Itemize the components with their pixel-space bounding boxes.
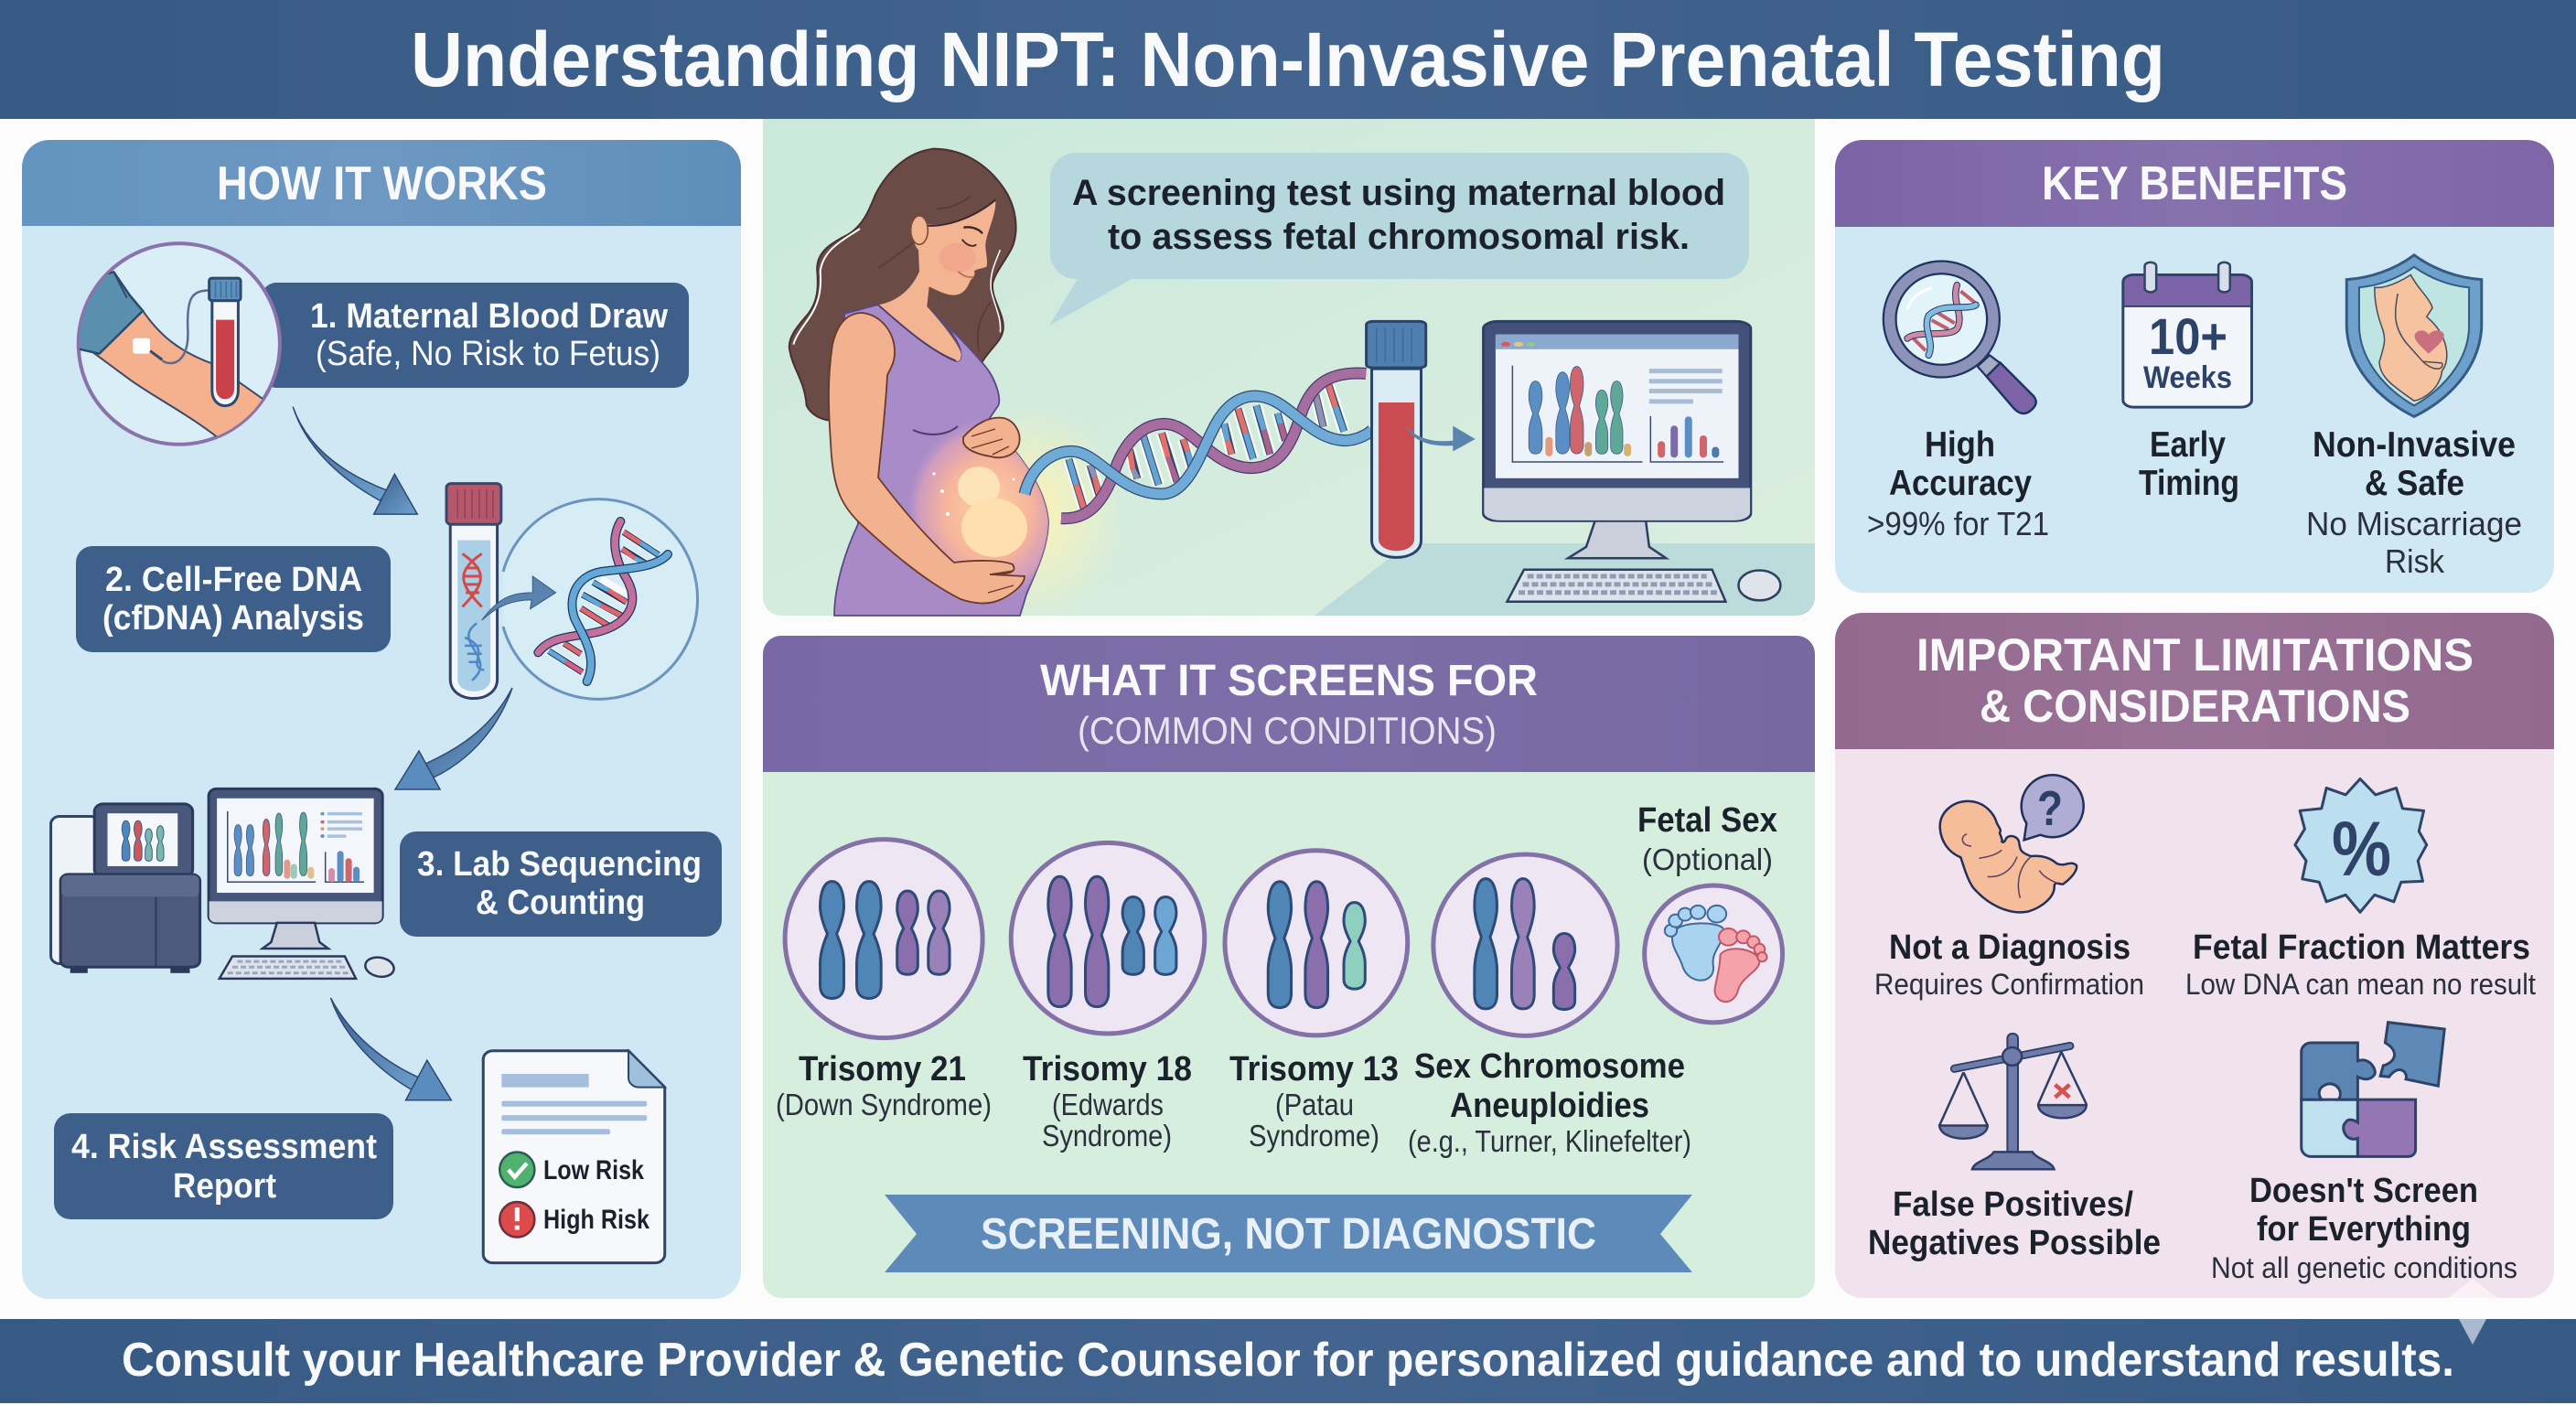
karyotype: trisomy 21 xyxy=(785,840,982,1038)
label: trisomy 18: Trisomy 18 xyxy=(1023,1050,1192,1089)
step 3 label: 3. Lab Sequencing xyxy=(417,845,702,884)
panel: key benefits xyxy=(1835,140,2554,593)
icon: puzzle pieces xyxy=(2302,1023,2444,1156)
limitation: not a diagnosis xyxy=(1874,928,2144,1001)
label: sex chromosome aneuploidies: (e.g., Turner, Klinefelter) xyxy=(1408,1124,1691,1158)
step 3 label: & Counting xyxy=(476,884,645,922)
label: trisomy 18 xyxy=(1023,1050,1192,1153)
heading: what it screens for: WHAT IT SCREENS FOR xyxy=(1040,657,1538,705)
label: sex chromosome aneuploidies: Aneuploidies xyxy=(1450,1087,1649,1125)
benefit: non-invasive and safe: & Safe xyxy=(2365,464,2464,503)
benefit: high accuracy: Accuracy xyxy=(1889,464,2032,503)
arm and lower hand xyxy=(829,313,1025,604)
benefit: non-invasive and safe: No Miscarriage xyxy=(2306,505,2522,542)
benefit: high accuracy: >99% for T21 xyxy=(1867,505,2049,542)
footer bar xyxy=(0,1319,2576,1403)
heading: important limitations xyxy=(1916,629,2474,732)
step 3 label xyxy=(400,831,722,937)
heading: how it works: HOW IT WORKS xyxy=(217,157,547,210)
benefit: early timing: Early xyxy=(2150,425,2226,465)
illustration: pregnant woman xyxy=(789,149,1125,622)
step 4 label xyxy=(54,1113,393,1219)
label: trisomy 13: Trisomy 13 xyxy=(1229,1050,1399,1089)
label: trisomy 21: (Down Syndrome) xyxy=(776,1088,992,1121)
page header bar xyxy=(0,0,2576,119)
label: trisomy 13 xyxy=(1229,1050,1399,1153)
label: fetal sex: Fetal Sex xyxy=(1637,801,1777,840)
ribbon: screening, not diagnostic xyxy=(885,1195,1692,1272)
belly halo xyxy=(942,402,1125,622)
label: sex chromosome aneuploidies: Sex Chromosome xyxy=(1414,1047,1685,1086)
karyotype: trisomy 13 xyxy=(1225,851,1408,1035)
speech bubble xyxy=(1049,153,1749,326)
dress xyxy=(834,305,1048,616)
icon: percent badge: % xyxy=(2332,806,2391,892)
label: sex chromosome aneuploidies xyxy=(1408,1047,1691,1158)
limitation: false positives and negatives: False Positives/ xyxy=(1893,1185,2133,1224)
step 1 label: (Safe, No Risk to Fetus) xyxy=(316,335,660,373)
icon: blood draw from arm xyxy=(68,243,280,445)
label: trisomy 13: Syndrome) xyxy=(1249,1119,1379,1153)
limitation: does not screen for everything xyxy=(2211,1172,2517,1284)
icon: risk report document: Low Risk xyxy=(543,1155,644,1185)
icon: risk report document: High Risk xyxy=(543,1205,649,1235)
heading: key benefits: KEY BENEFITS xyxy=(2042,157,2347,210)
limitation: not a diagnosis: Not a Diagnosis xyxy=(1889,928,2131,967)
title: Understanding NIPT: Non-Invasive Prenatal Testing xyxy=(411,16,2165,102)
icon: risk report document xyxy=(483,1051,665,1263)
speech bubble: A screening test using maternal blood xyxy=(1072,173,1725,213)
benefit: non-invasive and safe: Non-Invasive xyxy=(2313,425,2516,465)
step 1 label: 1. Maternal Blood Draw xyxy=(310,297,668,336)
illustration: DNA helix from fetus to tube xyxy=(1025,373,1372,519)
limitation: does not screen for everything: Not all genetic conditions xyxy=(2211,1251,2517,1284)
icon: calendar 10+ weeks: Weeks xyxy=(2143,360,2232,395)
benefit: non-invasive and safe: Risk xyxy=(2385,542,2445,580)
label: fetal sex: (Optional) xyxy=(1642,842,1773,876)
benefit: early timing xyxy=(2139,425,2239,503)
karyotype: sex chromosome aneuploidies xyxy=(1433,854,1617,1035)
arrow: step 3 to 4 xyxy=(331,998,451,1100)
step 2 label xyxy=(76,546,391,652)
heading: important limitations: IMPORTANT LIMITATIONS xyxy=(1916,629,2474,681)
icon: calendar 10+ weeks xyxy=(2123,263,2251,407)
limitation: fetal fraction matters xyxy=(2185,928,2536,1001)
limitation: false positives and negatives xyxy=(1868,1185,2161,1262)
benefit: high accuracy xyxy=(1867,425,2049,542)
icon: balance scale xyxy=(1939,1034,2087,1169)
label: fetal sex xyxy=(1637,801,1777,876)
label: trisomy 21: Trisomy 21 xyxy=(799,1050,966,1089)
icon: magnifier with DNA xyxy=(1890,267,2036,413)
ribbon: screening, not diagnostic: SCREENING, NOT DIAGNOSTIC xyxy=(981,1210,1596,1259)
label: trisomy 21 xyxy=(776,1050,992,1121)
benefit: early timing: Timing xyxy=(2139,464,2239,503)
label: trisomy 18: Syndrome) xyxy=(1042,1119,1172,1153)
icon: fetus with question mark xyxy=(1940,775,2084,912)
step 2 label: (cfDNA) Analysis xyxy=(102,599,364,638)
icon: cfDNA tube and helix xyxy=(446,484,698,699)
arrow: step 1 to 2 xyxy=(293,407,417,514)
limitation: does not screen for everything: for Everything xyxy=(2257,1210,2471,1249)
icon: fetus with question mark: ? xyxy=(2037,781,2063,836)
panel: how it works xyxy=(22,140,741,1299)
heading: important limitations: & CONSIDERATIONS xyxy=(1980,681,2410,732)
benefit: high accuracy: High xyxy=(1925,425,1995,465)
limitation: fetal fraction matters: Fetal Fraction Matters xyxy=(2193,928,2530,967)
desk surface xyxy=(1315,543,1815,616)
icon: calendar 10+ weeks: 10+ xyxy=(2149,307,2227,365)
icon: sequencer and computer xyxy=(51,788,396,980)
label: trisomy 18: (Edwards xyxy=(1052,1088,1164,1121)
icon: percent badge xyxy=(2295,778,2427,912)
footer message: Consult your Healthcare Provider & Genetic Counselor for personalized guidance and to understand results. xyxy=(122,1334,2454,1387)
limitation: fetal fraction matters: Low DNA can mean no result xyxy=(2185,968,2536,1001)
speech bubble: to assess fetal chromosomal risk. xyxy=(1108,217,1690,257)
limitation: does not screen for everything: Doesn't Screen xyxy=(2249,1172,2478,1210)
limitation: not a diagnosis: Requires Confirmation xyxy=(1874,968,2144,1001)
illustration: computer with chromosome chart xyxy=(1484,321,1780,602)
panel: what it screens for xyxy=(763,636,1815,1298)
step 2 label: 2. Cell-Free DNA xyxy=(105,561,362,599)
step 4 label: 4. Risk Assessment xyxy=(71,1128,377,1166)
illustration: blood tube xyxy=(1367,321,1476,557)
karyotype: trisomy 18 xyxy=(1011,842,1205,1034)
icon: baby feet xyxy=(1645,885,1783,1023)
icon: shield with pregnant torso xyxy=(2346,255,2482,416)
benefit: non-invasive and safe xyxy=(2306,425,2522,580)
limitation: false positives and negatives: Negatives Possible xyxy=(1868,1224,2161,1262)
upper hand xyxy=(963,418,1020,457)
panel: important limitations xyxy=(1835,613,2554,1298)
label: trisomy 13: (Patau xyxy=(1275,1088,1354,1121)
subheading: common conditions: (COMMON CONDITIONS) xyxy=(1078,709,1497,752)
arrow: step 2 to 3 xyxy=(395,688,512,789)
step 1 label xyxy=(262,283,689,388)
panel: mother illustration and definition xyxy=(763,119,1815,622)
step 4 label: Report xyxy=(173,1167,276,1206)
